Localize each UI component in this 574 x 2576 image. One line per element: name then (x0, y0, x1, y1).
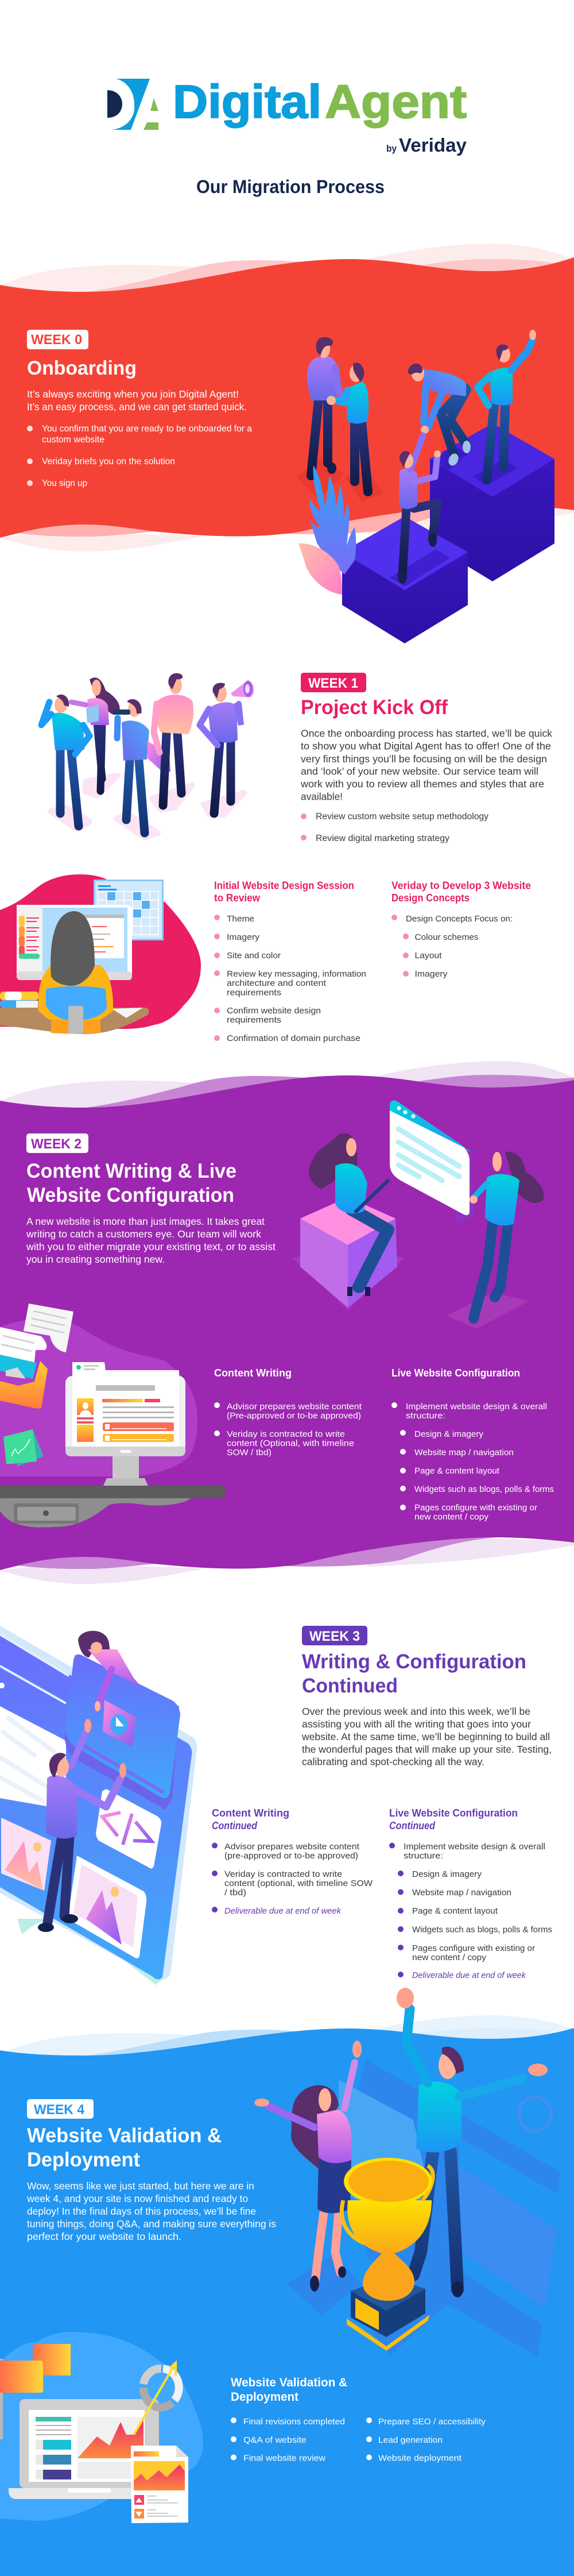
heading: project kick off: Project Kick Off (301, 696, 448, 719)
column: initial website design session: Theme (227, 914, 254, 924)
person: climbing (398, 435, 441, 584)
column: website validation and deployment: Deployment (231, 2390, 298, 2404)
column: live website configuration continued: Live Website Configuration (389, 1807, 518, 1819)
column: content writing continued (212, 1807, 373, 1916)
envelope (0, 1361, 48, 1409)
illustration: team climbing blocks (297, 330, 554, 643)
illustration: analytics laptop (0, 2332, 203, 2523)
badge: week 4 (27, 2099, 94, 2119)
text block: week 4 intro: perfect for your website to launch. (27, 2231, 181, 2242)
column: initial website design session: to Review (214, 892, 261, 904)
text block: week 3 intro: website. At the same time, we’ll be beginning to build all (301, 1731, 550, 1742)
column: initial website design session: requirements (227, 1015, 281, 1025)
text block: week 3 intro: the wonderful pages that will make up your site. Testing, (302, 1744, 552, 1755)
column: live website configuration continued: Widgets such as blogs, polls & forms (412, 1925, 552, 1935)
bullet list: onboarding steps: custom website (42, 435, 104, 445)
column: live website configuration continued: Page & content layout (412, 1906, 498, 1916)
column: live website configuration: Widgets such as blogs, polls & forms (414, 1484, 554, 1494)
heading: website validation and deployment: Deployment (27, 2149, 140, 2171)
column: live website configuration continued: Deliverable due at end of week (412, 1970, 526, 1980)
text block: kick off intro (300, 727, 552, 802)
person: standing woman (470, 1152, 544, 1318)
heading: website validation and deployment (27, 2124, 222, 2171)
illustration: designer at desk (0, 874, 201, 1034)
badge: week 3: WEEK 3 (309, 1629, 360, 1644)
logo: Digital Agent by Veriday: Agent (325, 76, 467, 128)
icon: donut chart (144, 2369, 179, 2407)
illustration: team with trophy (254, 1988, 568, 2357)
panel: week 1 project kick off (0, 673, 552, 1043)
heading: website validation and deployment: Website Validation & (27, 2124, 222, 2147)
person: cyan sweater (327, 363, 369, 492)
title: Our Migration Process (196, 176, 385, 197)
column: content writing: content (Optional, with timeline (227, 1439, 354, 1448)
bullet list: kick off actions (301, 812, 488, 843)
bullet list: onboarding steps: You sign up (42, 479, 87, 488)
text block: onboarding intro: It’s an easy process, and we can get started quick. (27, 401, 247, 412)
illustration: content desk with monitor (0, 1304, 226, 1528)
front window (64, 1655, 180, 1810)
text block: week 2 intro: with you to either migrate your existing text, or to assist (26, 1241, 276, 1252)
column: content writing continued: Content Writing (212, 1807, 289, 1819)
column: website validation and deployment: Website deployment (378, 2453, 462, 2463)
background dashboard panels (287, 2060, 568, 2357)
column: live website configuration: Pages configure with existing or (414, 1503, 537, 1513)
person: man reaching (38, 1719, 126, 1932)
icon: gold trophy (342, 2158, 433, 2351)
column: initial website design session: Imagery (227, 932, 260, 942)
column: content writing continued: / tbd) (224, 1888, 246, 1898)
image card right (68, 1856, 146, 1958)
person: cyan with hand at brow (41, 695, 90, 826)
text block: week 2 intro: A new website is more than just images. It takes great (26, 1216, 265, 1227)
badge: week 0 (27, 330, 88, 349)
column: design concepts: Design Concepts (391, 892, 470, 904)
column: design concepts: Design Concepts Focus on: (406, 914, 513, 924)
code card (96, 1789, 161, 1869)
column: content writing continued: (pre-approved or to-be approved) (224, 1851, 358, 1861)
heading: writing and configuration continued (302, 1651, 526, 1697)
column: website validation and deployment: Website Validation & (231, 2376, 347, 2389)
bullet list: onboarding steps: Veriday briefs you on the solution (42, 457, 175, 466)
badge: week 4: WEEK 4 (34, 2102, 85, 2118)
badge: week 2 (26, 1133, 88, 1153)
panel: week 3 writing and configuration continued (0, 1626, 552, 1985)
column: design concepts (391, 880, 531, 979)
mint base (17, 1913, 170, 1985)
column: website validation and deployment: Final website review (243, 2453, 325, 2463)
column: initial website design session: Review key messaging, information (227, 969, 366, 979)
monitor with profile page (65, 1362, 185, 1486)
column: initial website design session: requirements (227, 988, 281, 997)
logo: Digital Agent by Veriday (107, 76, 467, 156)
text block: week 3 intro: Over the previous week and into this week, we’ll be (302, 1706, 530, 1717)
text block: kick off intro: and ‘look’ of your new website. Our service team will (301, 765, 538, 777)
arrow: growth trend (134, 2363, 176, 2435)
column: initial website design session: Confirm website design (227, 1006, 321, 1016)
column: design concepts: Imagery (414, 969, 448, 979)
heading: content writing and live website configuration: Content Writing & Live (26, 1160, 236, 1182)
text block: week 2 intro: writing to catch a customers eye. Our team will work (26, 1228, 261, 1240)
logo: Digital Agent by Veriday: by (386, 143, 397, 154)
column: website validation and deployment (231, 2376, 486, 2463)
books (0, 992, 38, 1008)
heading: onboarding: Onboarding (27, 357, 137, 379)
text block: week 3 intro: calibrating and spot-checking all the way. (302, 1756, 484, 1767)
person: raising arm on block (478, 330, 536, 480)
column: content writing continued: Veriday is contracted to write (224, 1869, 342, 1879)
badge: week 3 (302, 1626, 367, 1645)
column: website validation and deployment: Final revisions completed (243, 2417, 345, 2427)
desk (0, 1008, 149, 1034)
person: woman with folder (71, 677, 120, 791)
panel: week 2 content writing (0, 1061, 574, 1584)
person: woman leaning (78, 1631, 141, 1711)
column: design concepts: Layout (414, 951, 442, 961)
person: purple with megaphone (200, 680, 254, 813)
column: initial website design session (214, 880, 366, 1043)
flags (0, 2344, 71, 2439)
column: live website configuration: Design & imagery (414, 1429, 483, 1439)
column: live website configuration: new content / copy (414, 1512, 489, 1522)
column: content writing: SOW / tbd) (227, 1448, 272, 1457)
icon: pink leaf (298, 543, 342, 595)
column: content writing: Veriday is contracted to write (227, 1429, 345, 1439)
icon: purple briefcase (148, 741, 170, 773)
column: initial website design session: Initial Website Design Session (214, 880, 354, 892)
white page area (0, 1706, 66, 1810)
bullet list: onboarding steps (27, 424, 252, 488)
heading: content writing and live website configuration (26, 1160, 236, 1206)
person: purple sweater (307, 337, 344, 476)
column: initial website design session: Site and color (227, 951, 281, 961)
badge: week 0: WEEK 0 (31, 332, 82, 348)
bullet list: kick off actions: Review digital marketing strategy (316, 834, 449, 843)
person: seen from behind (38, 911, 113, 1034)
column: initial website design session: architecture and content (227, 978, 327, 988)
person: peach sweater (154, 673, 193, 805)
desk (0, 1486, 226, 1528)
column: design concepts: Colour schemes (414, 932, 479, 942)
person: bending to help (408, 364, 471, 467)
text block: kick off intro: work with you to review all themes and styles that are (300, 778, 544, 789)
illustration: team of five (41, 673, 254, 838)
image card left (1, 1818, 51, 1891)
person: man cheering (397, 1988, 548, 2297)
text block: onboarding intro (27, 388, 247, 412)
text block: onboarding intro: It’s always exciting when you join Digital Agent! (27, 388, 239, 400)
text block: week 4 intro (26, 2180, 276, 2242)
text block: week 4 intro: Wow, seems like we just started, but here we are in (27, 2180, 254, 2192)
person: woman cheering (254, 2041, 362, 2292)
back panel (0, 1626, 197, 1980)
column: live website configuration continued: Continued (389, 1820, 436, 1831)
logo: Digital Agent by Veriday: Digital (173, 76, 321, 128)
heading: content writing and live website configuration: Website Configuration (27, 1184, 234, 1206)
bullet list: kick off actions: Review custom website setup methodology (316, 812, 488, 822)
column: live website configuration: Website map / navigation (414, 1448, 514, 1457)
play icon (103, 1700, 136, 1747)
column: content writing: (Pre-approved or to-be approved) (227, 1411, 361, 1421)
column: live website configuration: Implement website design & overall (406, 1402, 547, 1412)
browser window (390, 1101, 474, 1224)
person: man with binoculars (113, 699, 149, 833)
person: seated woman with tablet (309, 1133, 388, 1296)
papers (0, 1304, 73, 1379)
column: live website configuration continued: Design & imagery (412, 1869, 482, 1879)
column: content writing continued: Deliverable due at end of week (224, 1906, 342, 1916)
column: live website configuration: Page & content layout (414, 1466, 500, 1476)
text block: week 4 intro: week 4, and your site is now finished and ready to (26, 2193, 248, 2204)
text block: kick off intro: very first things you’ll be focusing on will be the design (301, 753, 547, 765)
column: live website configuration: structure: (406, 1411, 445, 1421)
cube seat (293, 1197, 405, 1310)
text block: kick off intro: Once the onboarding process has started, we’ll be quick (301, 727, 552, 739)
heading: writing and configuration continued: Continued (302, 1675, 398, 1697)
text block: week 2 intro (26, 1216, 276, 1265)
text block: week 3 intro: assisting you with all the writing that goes into your (302, 1718, 531, 1730)
monitor (17, 905, 132, 980)
column: content writing: Advisor prepares website content (227, 1402, 362, 1412)
column: live website configuration continued (389, 1807, 552, 1980)
illustration: two women with browser window (293, 1101, 544, 1329)
column: content writing: Content Writing (214, 1367, 292, 1379)
badge: week 1: WEEK 1 (308, 676, 358, 691)
column: live website configuration (391, 1367, 554, 1522)
icon: blue plant (309, 465, 356, 574)
illustration: people building web pages (0, 1626, 197, 1985)
column: content writing continued: Continued (212, 1820, 258, 1831)
column: live website configuration continued: Implement website design & overall (404, 1842, 545, 1852)
column: live website configuration continued: Pages configure with existing or (412, 1943, 535, 1953)
badge: week 1 (301, 673, 366, 692)
text block: week 4 intro: tuning things, doing Q&A, and making sure everything is (27, 2218, 276, 2230)
calendar (94, 880, 164, 940)
column: content writing (214, 1367, 362, 1457)
panel: week 4 validation and deployment (0, 1988, 574, 2576)
laptop (9, 2399, 159, 2499)
column: live website configuration continued: Website map / navigation (412, 1888, 511, 1898)
document with chart (131, 2446, 188, 2523)
column: live website configuration continued: structure: (404, 1851, 443, 1861)
paper (112, 1008, 143, 1018)
column: content writing continued: content (optional, with timeline SOW (224, 1879, 373, 1888)
text block: kick off intro: available! (301, 790, 343, 802)
text block: kick off intro: to show you what Digital Agent has to offer! One of the (301, 740, 551, 751)
text block: week 3 intro (301, 1706, 552, 1767)
text block: week 2 intro: you in creating something new. (26, 1254, 165, 1265)
text block: week 4 intro: deploy! In the final days of this process, we’ll be fine (27, 2205, 256, 2217)
column: website validation and deployment: Prepare SEO / accessibility (378, 2417, 486, 2427)
column: initial website design session: Confirmation of domain purchase (227, 1034, 360, 1043)
bullet list: onboarding steps: You confirm that you are ready to be onboarded for a (42, 424, 252, 434)
column: live website configuration: Live Website Configuration (391, 1367, 520, 1379)
heading: writing and configuration continued: Writing & Configuration (302, 1651, 526, 1673)
column: design concepts: Veriday to Develop 3 Website (391, 880, 531, 892)
badge: week 2: WEEK 2 (31, 1136, 82, 1152)
logo: Digital Agent by Veriday: Veriday (399, 134, 467, 156)
column: content writing continued: Advisor prepares website content (224, 1842, 360, 1852)
column: live website configuration continued: new content / copy (412, 1953, 487, 1962)
column: website validation and deployment: Lead generation (378, 2435, 443, 2445)
column: website validation and deployment: Q&A of website (243, 2435, 307, 2445)
pad (447, 1293, 529, 1329)
sticky note (3, 1429, 44, 1467)
